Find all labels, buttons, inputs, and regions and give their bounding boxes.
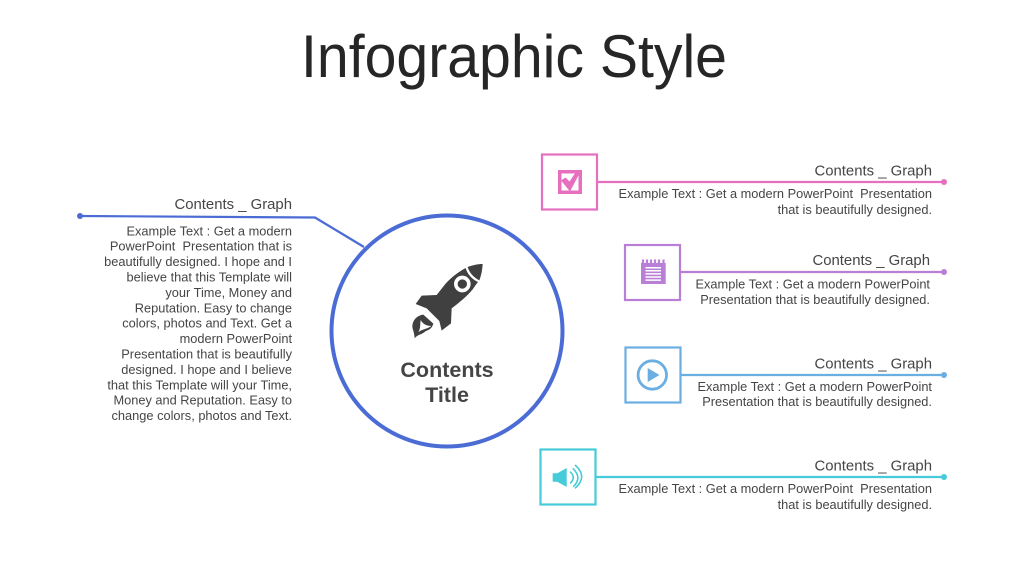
left heading: Contents _ Graph <box>174 197 292 213</box>
body: Example Text : Get a modern PowerPoint <box>698 379 932 394</box>
icon box: notepad <box>625 245 680 300</box>
left body text: PowerPoint Presentation that is <box>110 239 292 254</box>
connector line <box>680 271 944 273</box>
central circle <box>332 216 562 446</box>
icon box: play <box>626 348 680 402</box>
heading: Contents _ Graph <box>814 163 932 179</box>
body: that is beautifully designed. <box>778 202 932 217</box>
body: Presentation that is beautifully designed. <box>702 394 932 409</box>
body: Example Text : Get a modern PowerPoint Presentation <box>619 481 932 496</box>
panel: item 1 pink <box>542 154 947 217</box>
connector line <box>680 374 944 376</box>
central circle: Title <box>425 383 469 407</box>
left body text: modern PowerPoint <box>180 331 292 346</box>
left connector line <box>77 213 364 247</box>
icon box: checkbox <box>542 154 597 210</box>
body: Presentation that is beautifully designed. <box>700 292 930 307</box>
heading: Contents _ Graph <box>814 356 932 372</box>
icon box: speaker <box>540 450 596 504</box>
panel: item 3 blue <box>626 348 947 409</box>
circle title: Contents <box>400 358 494 382</box>
body: that is beautifully designed. <box>778 497 932 512</box>
heading: Contents _ Graph <box>812 253 930 269</box>
left body text: Presentation that is beautifully <box>121 346 293 362</box>
panel: left content <box>77 197 364 423</box>
left body text: designed. I hope and I believe <box>121 362 292 377</box>
connector line <box>596 476 944 478</box>
left body text: Money and Reputation. Easy to <box>113 393 292 408</box>
left body text: Example Text : Get a modern <box>126 223 292 238</box>
left body text: Reputation. Easy to change <box>135 300 292 315</box>
body: Example Text : Get a modern PowerPoint <box>696 276 930 292</box>
body: Example Text : Get a modern PowerPoint Presentation <box>619 186 932 201</box>
left body text: believe that this Template will <box>126 270 292 284</box>
panel: item 4 teal <box>540 450 947 512</box>
left body text: beautifully designed. I hope and I <box>104 254 292 269</box>
icon: rocket <box>412 264 483 338</box>
left body text: colors, photos and Text. Get a <box>122 316 293 331</box>
left body text: change colors, photos and Text. <box>112 408 292 423</box>
heading: Contents _ Graph <box>814 458 932 474</box>
title: Infographic Style <box>301 23 727 90</box>
connector line <box>597 181 944 183</box>
panel: item 2 purple <box>625 245 947 307</box>
left body text: that this Template will your Time, <box>107 377 292 392</box>
left body text: your Time, Money and <box>165 285 292 300</box>
